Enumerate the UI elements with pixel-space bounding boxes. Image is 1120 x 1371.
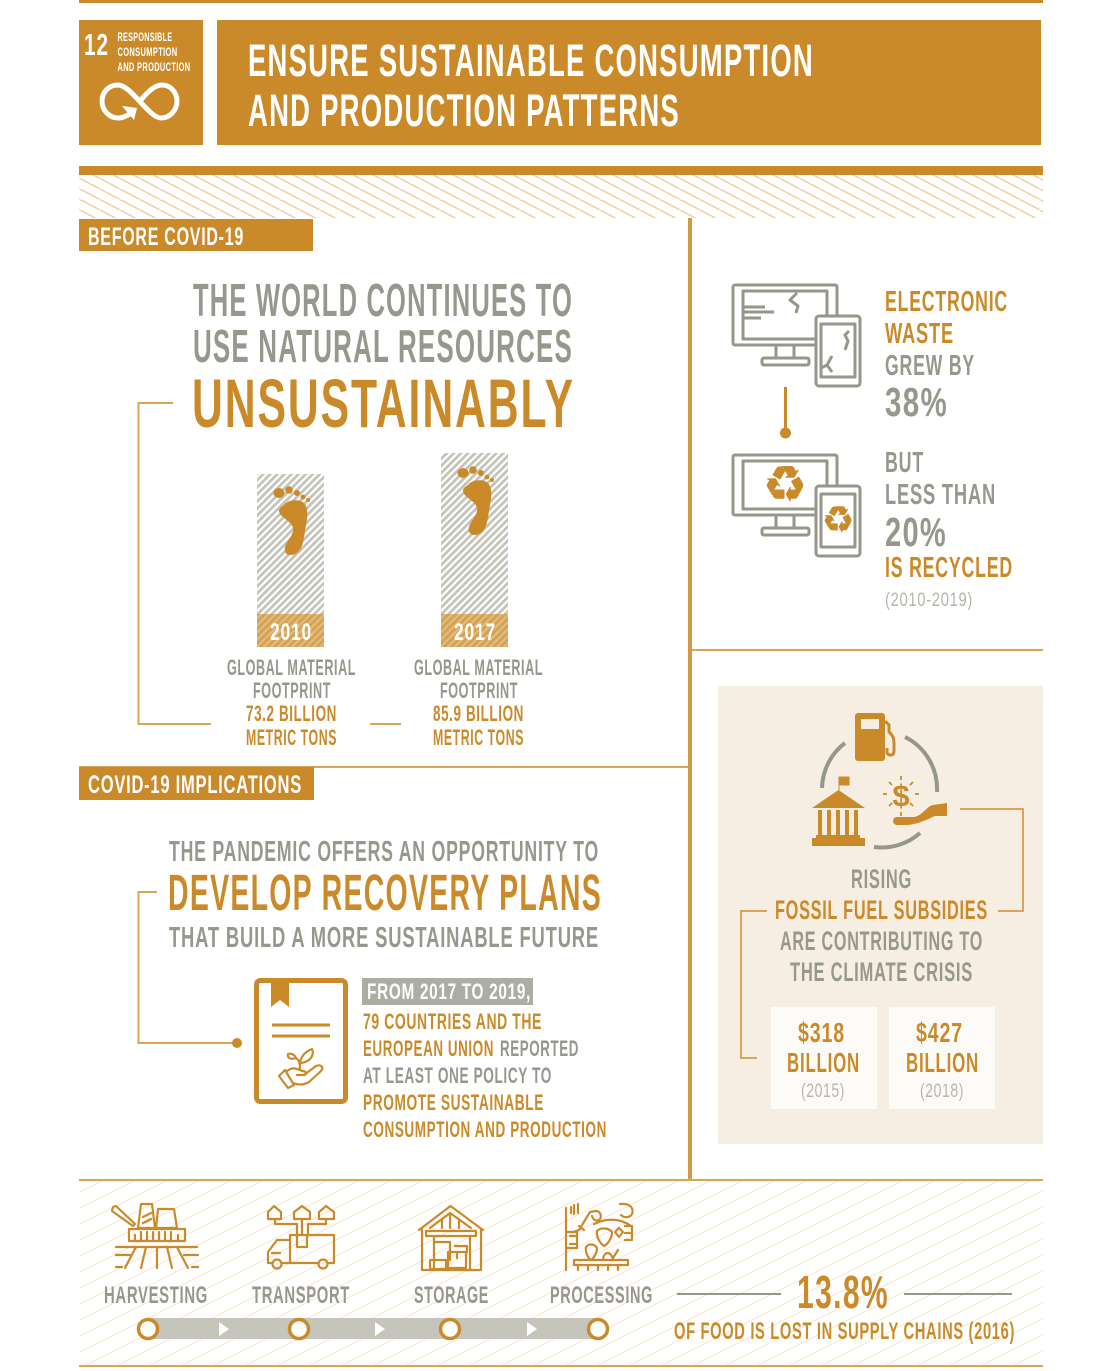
- layout dividers: [79, 218, 1043, 1367]
- labels: supply chain stages: HARVESTING: [104, 1282, 208, 1309]
- stat card: 2018 subsidies: $427: [916, 1017, 963, 1048]
- text: rising fossil fuel subsidies: RISING: [851, 864, 912, 894]
- stat card: 2015 subsidies: (2015): [801, 1081, 845, 1102]
- labels: supply chain stages: [104, 1282, 653, 1309]
- text: 2017 material footprint: GLOBAL MATERIAL: [414, 655, 543, 680]
- SDG 12 badge: RESPONSIBLE: [118, 30, 172, 44]
- text: rising fossil fuel subsidies: ARE CONTRIBUTING TO: [780, 926, 983, 956]
- heading: world continues to use natural resources unsustainably: [192, 274, 575, 442]
- policy text block: FROM 2017 TO 2019,: [367, 979, 531, 1004]
- bar: 2017 footprint: 2017: [454, 619, 496, 646]
- heading: develop recovery plans: DEVELOP RECOVERY PLANS: [168, 864, 602, 921]
- text: electronic waste statistic: WASTE: [885, 318, 954, 350]
- heading: world continues to use natural resources unsustainably: THE WORLD CONTINUES TO: [193, 274, 573, 326]
- title banner: AND PRODUCTION PATTERNS: [248, 85, 680, 136]
- heading: develop recovery plans: THAT BUILD A MORE SUSTAINABLE FUTURE: [169, 922, 599, 954]
- heading: develop recovery plans: THE PANDEMIC OFFERS AN OPPORTUNITY TO: [169, 836, 599, 868]
- stat card: 2015 subsidies: BILLION: [787, 1047, 860, 1078]
- heading: world continues to use natural resources unsustainably: USE NATURAL RESOURCES: [193, 320, 573, 372]
- policy text block: CONSUMPTION AND PRODUCTION: [363, 1117, 607, 1142]
- labels: supply chain stages: TRANSPORT: [252, 1282, 350, 1309]
- text: 2017 material footprint: METRIC TONS: [433, 725, 524, 750]
- band with diagonal hatch: [79, 166, 1043, 218]
- text: 2017 material footprint: 85.9 BILLION: [433, 701, 524, 726]
- stat card: 2015 subsidies: [771, 1007, 877, 1109]
- food loss statistic: [674, 1266, 1015, 1345]
- food loss statistic: 13.8%: [797, 1266, 889, 1318]
- policy text block: AT LEAST ONE POLICY TO: [363, 1063, 552, 1088]
- text: 2010 material footprint: [227, 655, 356, 750]
- stat card: 2018 subsidies: (2018): [920, 1081, 964, 1102]
- text: 2010 material footprint: FOOTPRINT: [253, 678, 331, 703]
- section label: before covid-19: BEFORE COVID-19: [88, 223, 244, 251]
- bar: 2010 footprint: 2010: [270, 619, 312, 646]
- bar: 2017 footprint: [441, 453, 508, 647]
- timeline track with stage markers: [138, 1318, 608, 1339]
- icon: cycle of pump, government, subsidy: $: [892, 778, 910, 813]
- section label: covid-19 implications: COVID-19 IMPLICATIONS: [88, 771, 302, 799]
- text: recycling statistic: 20%: [885, 509, 947, 555]
- top rule: [79, 0, 1043, 3]
- text: recycling statistic: (2010-2019): [885, 590, 973, 611]
- icon: delivery truck: [268, 1206, 334, 1268]
- bracket connector: footprint: [138, 403, 401, 724]
- bracket connector: recovery plans to policy: [138, 892, 242, 1048]
- icon: harvester: [112, 1204, 198, 1268]
- policy text block: REPORTED: [500, 1036, 579, 1061]
- text: recycling statistic: [885, 447, 1013, 611]
- section label: covid-19 implications: [79, 767, 314, 800]
- text: 2010 material footprint: METRIC TONS: [246, 725, 337, 750]
- text: recycling statistic: LESS THAN: [885, 479, 996, 511]
- text: electronic waste statistic: [885, 286, 1008, 425]
- stat card: 2015 subsidies: $318: [798, 1017, 845, 1048]
- labels: supply chain stages: STORAGE: [414, 1282, 489, 1309]
- connector arrow between monitors: [780, 387, 791, 438]
- SDG 12 badge: 12: [84, 27, 109, 62]
- panel background: supply chain: [79, 1181, 1043, 1365]
- icon: food processing: [566, 1204, 632, 1270]
- icon: broken monitor and tablet: [733, 285, 860, 386]
- bracket connector: subsidies: [741, 809, 1023, 1058]
- text: electronic waste statistic: GREW BY: [885, 350, 975, 382]
- text: 2010 material footprint: 73.2 BILLION: [246, 701, 337, 726]
- labels: supply chain stages: PROCESSING: [550, 1282, 653, 1309]
- title banner: [217, 20, 1041, 145]
- stat card: 2018 subsidies: [889, 1007, 995, 1109]
- text: electronic waste statistic: ELECTRONIC: [885, 286, 1008, 318]
- policy text block: EUROPEAN UNION: [363, 1036, 494, 1061]
- bar: 2010 footprint: [257, 474, 324, 647]
- icon: cycle of pump, government, subsidy: [812, 713, 947, 848]
- text: rising fossil fuel subsidies: THE CLIMATE CRISIS: [790, 957, 973, 987]
- icon: recycling monitor and tablet: ♻: [763, 456, 807, 513]
- text: rising fossil fuel subsidies: [775, 864, 988, 987]
- policy text block: PROMOTE SUSTAINABLE: [363, 1090, 544, 1115]
- text: recycling statistic: IS RECYCLED: [885, 552, 1013, 584]
- panel: fossil fuel subsidies: [718, 686, 1043, 1144]
- text: 2010 material footprint: GLOBAL MATERIAL: [227, 655, 356, 680]
- policy text block: 79 COUNTRIES AND THE: [363, 1009, 542, 1034]
- text: 2017 material footprint: [414, 655, 543, 750]
- text: recycling statistic: BUT: [885, 447, 924, 479]
- icon: warehouse: [419, 1206, 483, 1270]
- icon: recycling monitor and tablet: [733, 455, 860, 556]
- heading: world continues to use natural resources unsustainably: UNSUSTAINABLY: [192, 365, 575, 442]
- text: rising fossil fuel subsidies: FOSSIL FUEL SUBSIDIES: [775, 895, 988, 925]
- stat card: 2018 subsidies: BILLION: [906, 1047, 979, 1078]
- text: 2017 material footprint: FOOTPRINT: [440, 678, 518, 703]
- SDG 12 badge: CONSUMPTION: [118, 45, 178, 59]
- policy text block: [362, 978, 607, 1142]
- icon: recycling monitor and tablet: ♻: [822, 500, 854, 541]
- text: electronic waste statistic: 38%: [885, 379, 948, 425]
- icon: policy document with plant: [256, 980, 346, 1102]
- SDG 12 badge: AND PRODUCTION: [118, 60, 190, 74]
- heading: develop recovery plans: [168, 836, 602, 954]
- SDG 12 badge: [79, 20, 203, 145]
